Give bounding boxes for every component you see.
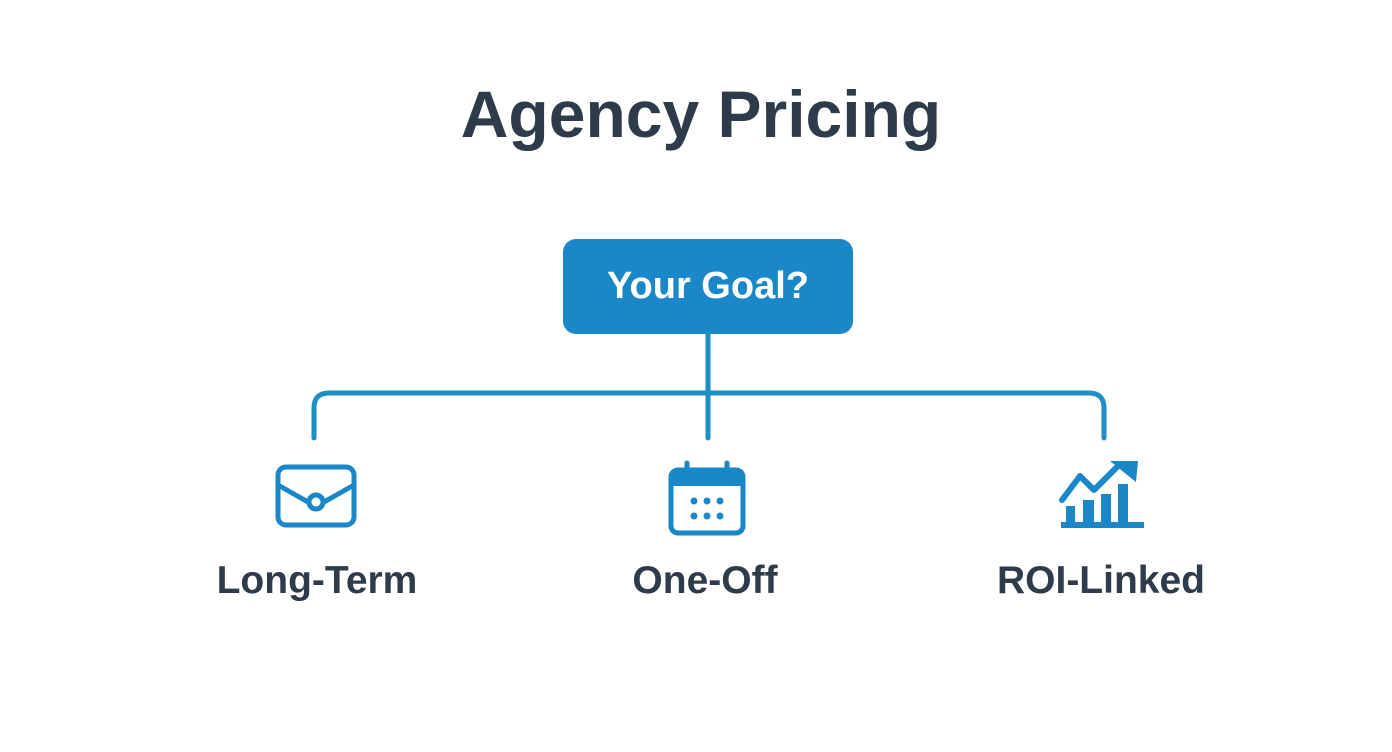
icon: envelope: [276, 464, 356, 528]
label: One-Off: One-Off: [632, 559, 778, 602]
title: Agency Pricing: [461, 77, 941, 151]
goal box: [563, 239, 853, 334]
label: Long-Term: Long-Term: [217, 559, 417, 602]
label: ROI-Linked: ROI-Linked: [997, 559, 1205, 602]
icon: calendar: [668, 460, 746, 536]
goal box: Your Goal?: [607, 265, 809, 307]
icon: growth chart: [1059, 461, 1144, 528]
